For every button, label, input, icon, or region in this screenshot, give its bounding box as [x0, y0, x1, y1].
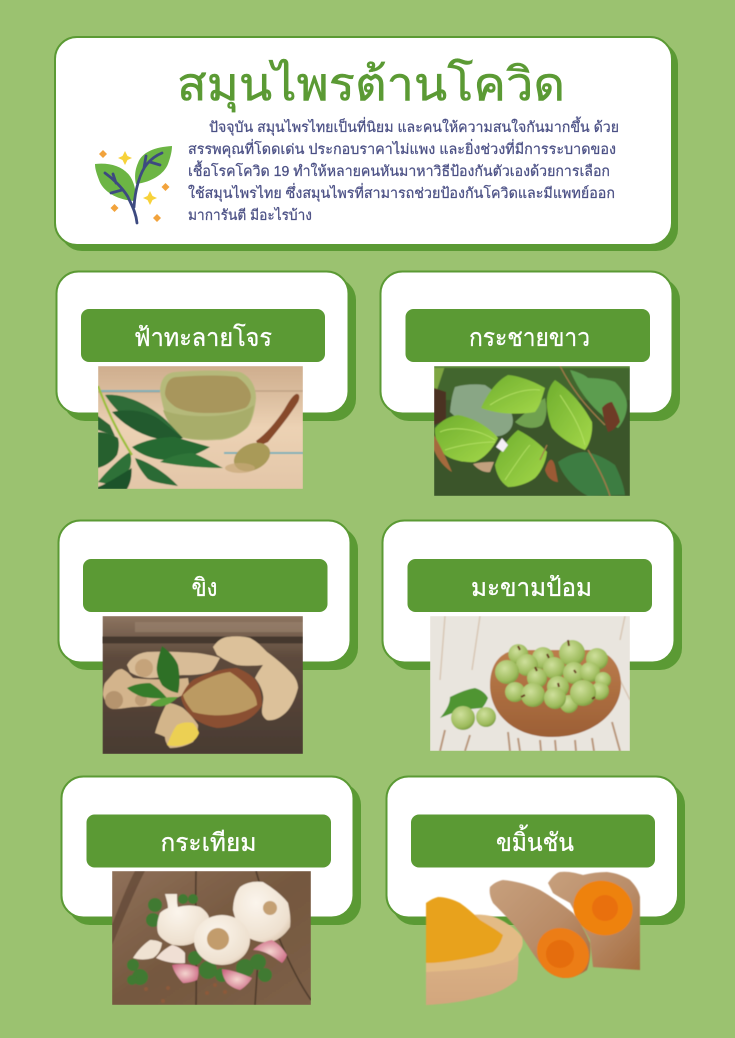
card [56, 272, 356, 421]
name banner [408, 559, 652, 612]
card [386, 776, 685, 925]
photo: กระชายขาว leaves [434, 366, 630, 496]
spoon [256, 394, 299, 446]
parsley [127, 894, 272, 985]
leaves [157, 646, 180, 693]
name banner [81, 309, 325, 362]
card [380, 272, 680, 421]
header panel [55, 37, 678, 251]
panel: กระชายขาว [380, 272, 680, 496]
intro paragraph: เชื้อโรคโควิด 19 ทำให้หลายคนหันมาหาวิธีป้องกันตัวเองด้วยการเลือก [188, 160, 610, 180]
name banner [406, 309, 650, 362]
front root [155, 703, 198, 748]
name banner: ขมิ้นชัน [496, 824, 574, 857]
bowl body [426, 950, 518, 1005]
panel: ขมิ้นชัน [386, 776, 685, 1005]
bowl rim [426, 915, 523, 972]
intro paragraph: ปัจจุบัน สมุนไพรไทยเป็นที่นิยม และคนให้ความสนใจกันมากขึ้น ด้วย [209, 116, 619, 136]
wooden bowl [181, 668, 262, 728]
name banner: ขิง [192, 574, 218, 602]
intro paragraph [188, 116, 619, 224]
photo: มะขามป้อม gooseberries in bowl [430, 616, 630, 751]
name banner: กระเทียม [160, 829, 256, 857]
back root [548, 872, 640, 970]
leaves [105, 395, 183, 438]
ginger root lower left [103, 669, 190, 709]
card [58, 520, 358, 670]
intro paragraph: ใช้สมุนไพรไทย ซึ่งสมุนไพรที่สามารถช่วยป้องกันโควิดและมีแพทย์ออก [188, 183, 615, 202]
name banner [411, 814, 655, 868]
name banner: มะขามป้อม [471, 574, 592, 602]
panel: กระเทียม [62, 776, 361, 1005]
title: สมุนไพรต้านโควิด [177, 58, 565, 113]
bowl [160, 370, 256, 440]
card [382, 520, 682, 670]
panel: มะขามป้อม [382, 520, 682, 751]
photo: ขมิ้นชัน turmeric roots and powder [426, 872, 640, 1005]
garlic cloves [133, 940, 162, 960]
intro paragraph: สรรพคุณที่โดดเด่น ประกอบราคาไม่แพง และยิ่งช่วงที่มีการระบาดของ [188, 139, 616, 158]
photo: ฟ้าทะลายโจร powder and leaves [98, 366, 303, 489]
photo: กระเทียม garlic on wood [112, 871, 311, 1005]
icon: herb sprig [95, 146, 172, 223]
panel: ฟ้าทะลายโจร [56, 272, 356, 489]
name banner [83, 559, 328, 612]
name banner: ฟ้าทะลายโจร [134, 323, 272, 352]
name banner [86, 814, 331, 868]
photo: ขิง ginger and powder [102, 616, 303, 754]
garlic bulbs [157, 894, 209, 946]
intro paragraph: มาการันตี มีอะไรบ้าง [188, 206, 312, 224]
spices [144, 983, 227, 1003]
panel: ขิง [58, 520, 358, 754]
powder [426, 897, 503, 963]
card [62, 776, 361, 925]
ginger root right [213, 636, 298, 720]
front root [490, 880, 590, 978]
ginger root long [127, 652, 220, 678]
name banner: กระชายขาว [469, 324, 590, 352]
